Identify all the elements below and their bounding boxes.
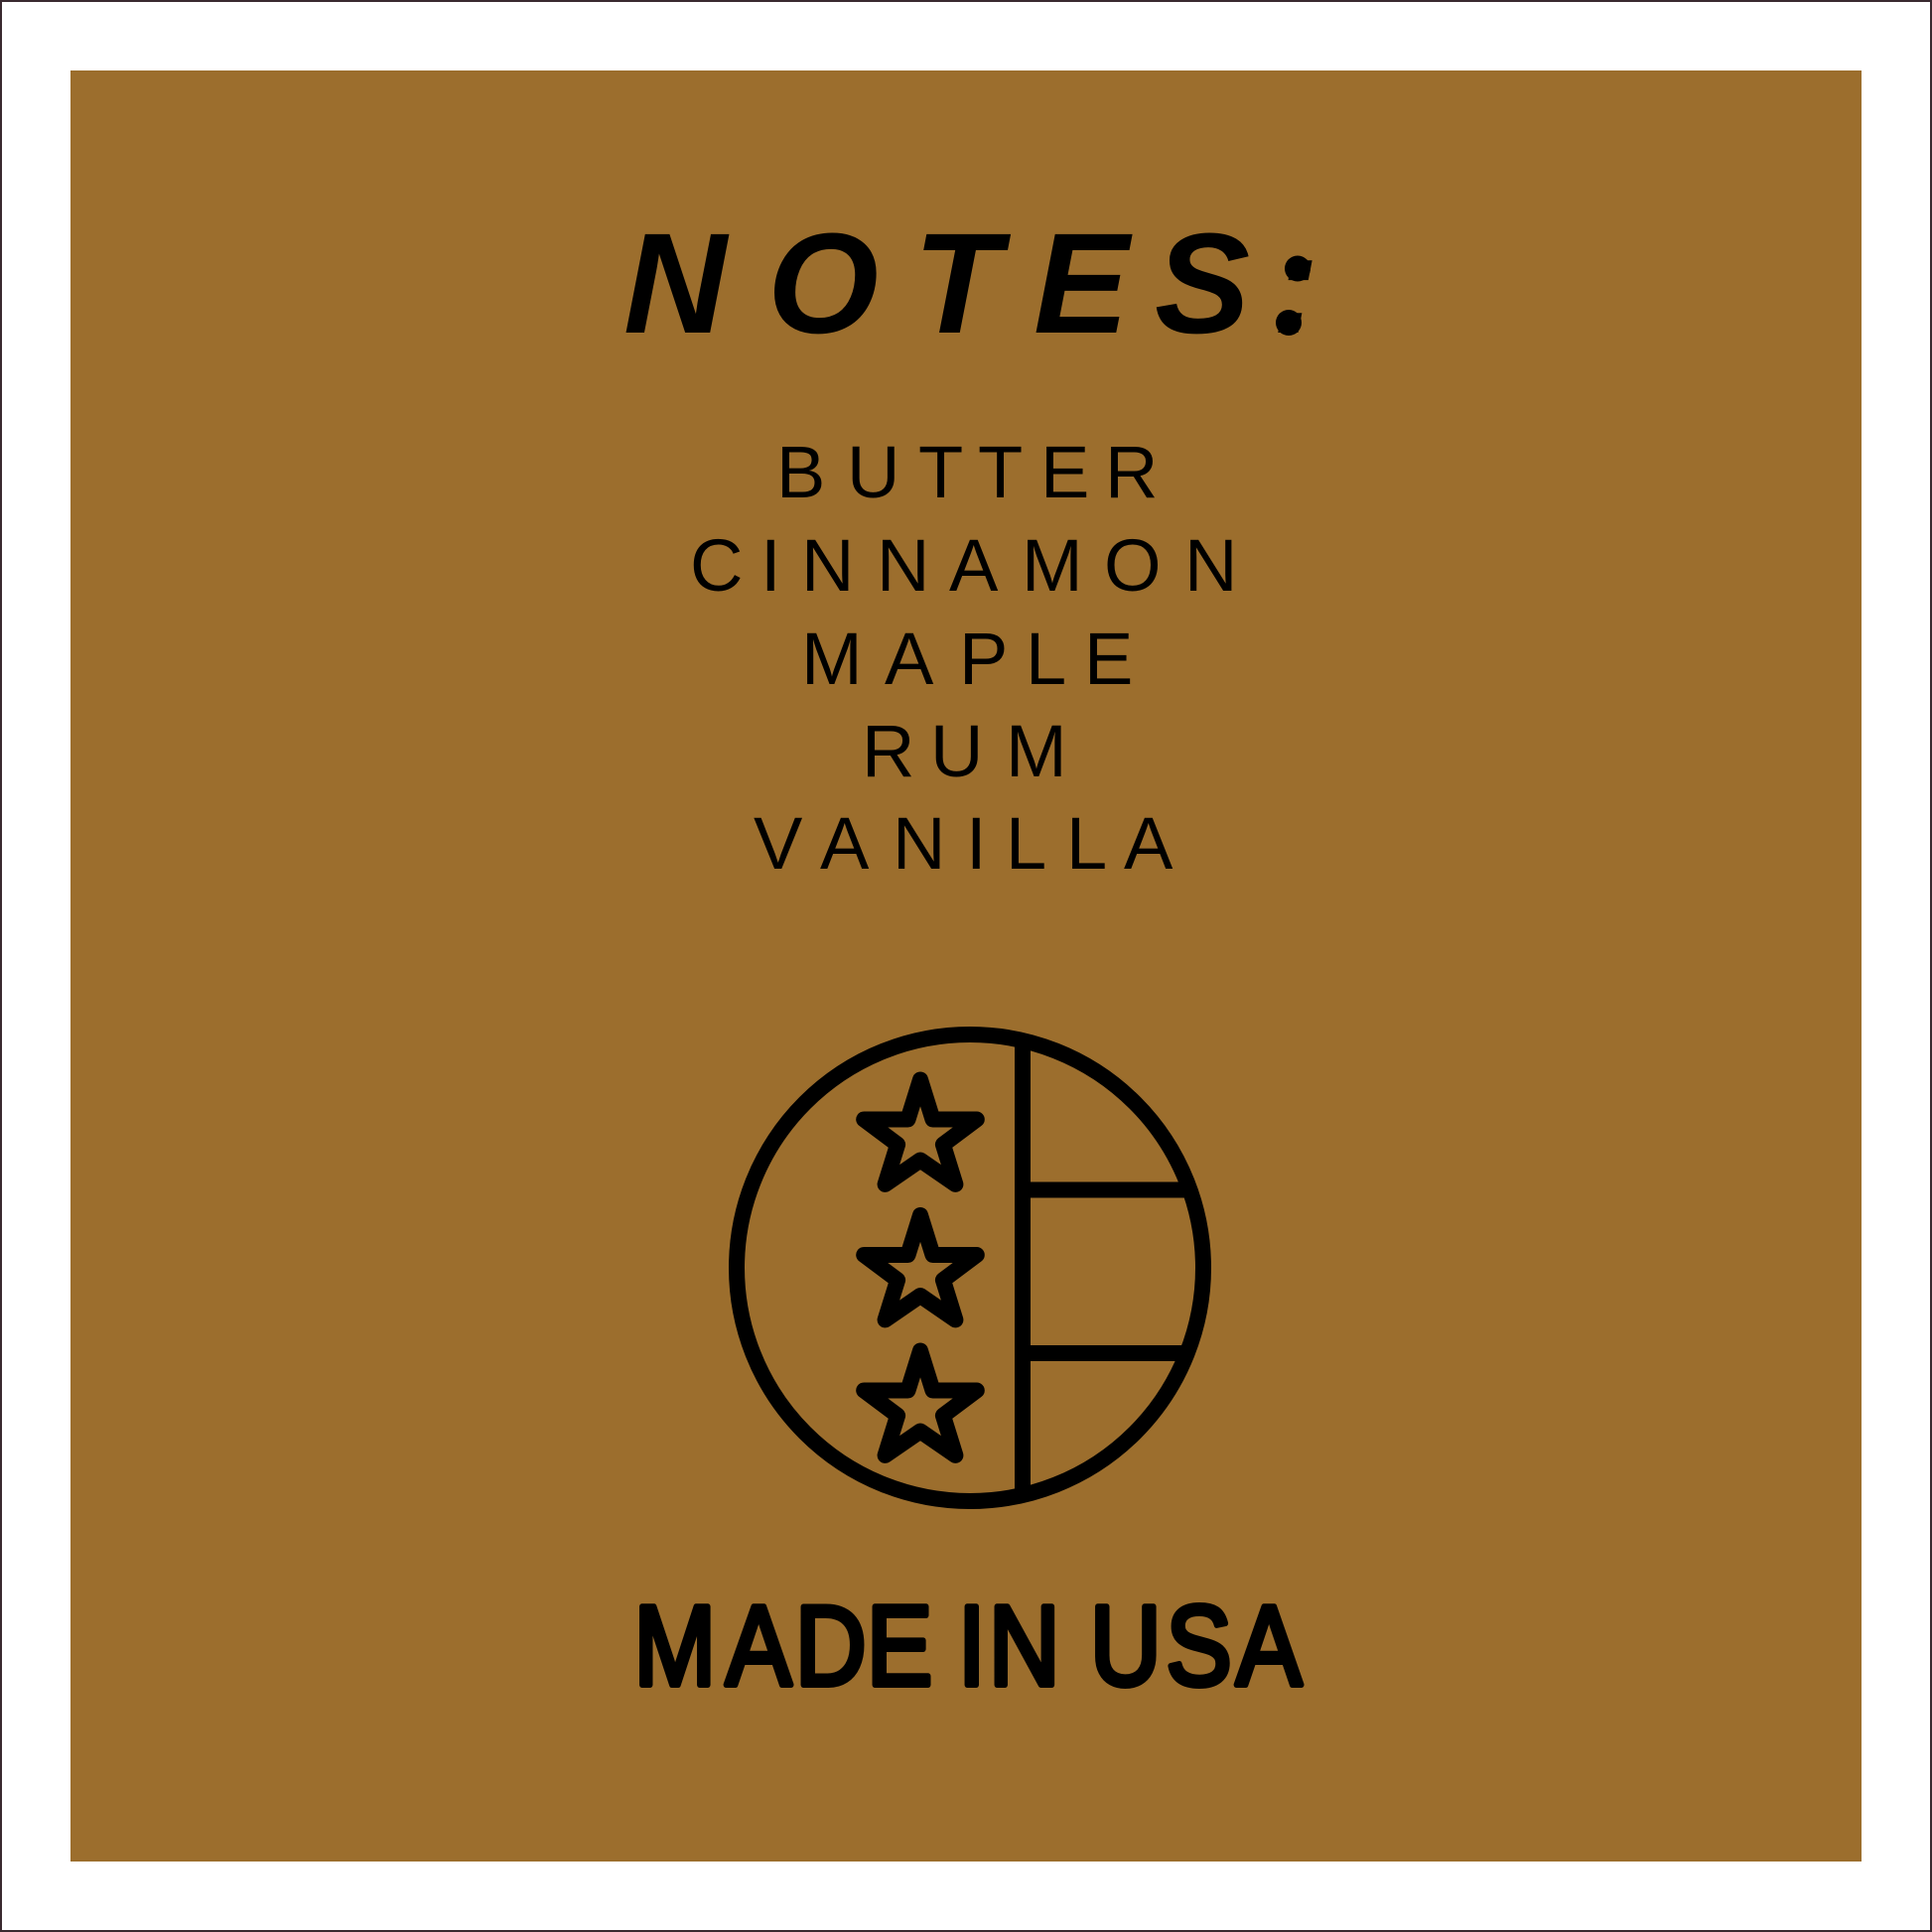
tasting notes list: MAPLE — [801, 618, 1133, 700]
tasting notes list: RUM — [862, 710, 1067, 792]
tasting notes list — [690, 431, 1237, 885]
tasting notes list: VANILLA — [754, 802, 1173, 885]
tasting notes list: BUTTER — [776, 431, 1158, 513]
icon: stars — [864, 1080, 977, 1455]
title: NOTES: — [623, 204, 1319, 363]
origin label: MADE IN USA — [633, 1583, 1303, 1710]
tasting notes list: CINNAMON — [690, 524, 1237, 607]
icon: USA flag globe badge — [737, 1035, 1203, 1501]
